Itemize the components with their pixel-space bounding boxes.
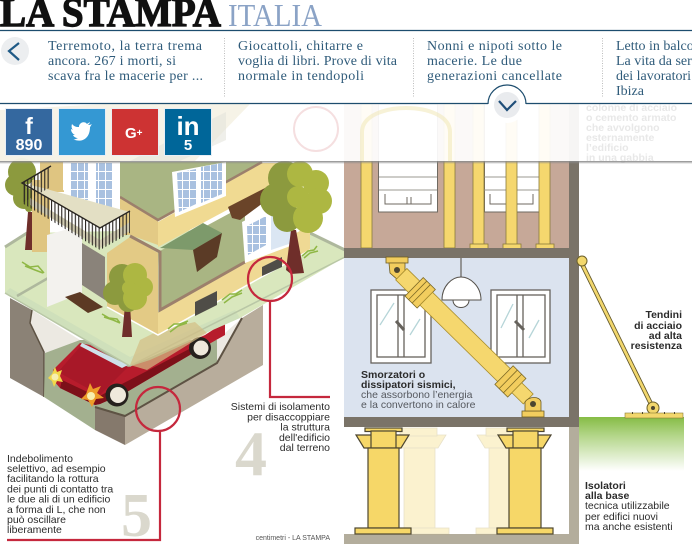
base pillars <box>355 428 553 534</box>
text: isolation systems <box>231 401 330 454</box>
text: tendons: resistenza <box>631 340 682 352</box>
text: isolation systems: per disaccoppiare <box>247 412 330 424</box>
lower right window <box>242 200 293 263</box>
shrubs <box>22 246 318 332</box>
left tree <box>5 158 36 250</box>
facebook: 890 <box>16 137 42 154</box>
news item 2 <box>238 39 398 84</box>
text: base isolators: Isolatori <box>585 480 626 492</box>
room windows <box>371 290 550 363</box>
faded text: steel columns: esternamente <box>586 132 654 144</box>
text: selective weakening: selettivo, ad esempio <box>7 463 106 475</box>
car <box>48 322 225 407</box>
headlights <box>48 367 104 407</box>
bench <box>160 223 222 272</box>
car roof seen through ground <box>130 322 207 370</box>
awning <box>228 187 267 220</box>
text: selective weakening: Indebolimento <box>7 453 73 465</box>
text: base isolators: alla base <box>585 490 630 502</box>
faded text: steel columns: colonne di acciaio <box>586 102 677 114</box>
text: selective weakening: facilitando la rottura <box>7 473 99 485</box>
facebook <box>6 108 52 156</box>
text: dampers: dissipatori sismici, <box>361 379 456 391</box>
sticky header <box>0 0 692 104</box>
faded text: steel columns: l’edificio <box>586 142 629 154</box>
large tree <box>260 161 332 274</box>
illustration: isometric house <box>5 158 345 445</box>
text: selective weakening: liberamente <box>7 524 62 536</box>
news item 1 <box>48 39 203 84</box>
balcony <box>22 166 130 250</box>
small tree <box>103 263 153 337</box>
google plus: G <box>125 125 137 142</box>
foundation and garage <box>10 298 263 445</box>
basement vents <box>195 257 282 316</box>
text: dampers <box>361 369 476 411</box>
text: selective weakening: dei punti di contatto tra <box>7 484 113 496</box>
text: base isolators <box>585 480 673 533</box>
news item 2: voglia di libri. Prove di vita <box>238 54 398 69</box>
news item 4 <box>616 39 692 99</box>
hanging lamp <box>442 258 481 308</box>
front door and entry <box>47 225 105 313</box>
upper yellow columns <box>361 104 554 248</box>
text: dampers: e la convertono in calore <box>361 399 476 411</box>
news item 3: macerie. Le due <box>427 54 522 69</box>
news item 3 <box>427 39 562 84</box>
twitter <box>58 108 106 156</box>
upper windows <box>378 104 540 212</box>
text: dampers: che assorbono l’energia <box>361 389 473 401</box>
share buttons <box>6 108 212 156</box>
steel tendon <box>577 256 684 471</box>
upper balcony window <box>63 162 120 217</box>
lower room <box>344 258 569 417</box>
news item 4: dei lavoratori <box>616 69 691 84</box>
news item 4: Ibiza <box>616 84 645 99</box>
text: dampers: Smorzatori o <box>361 369 425 381</box>
house walls <box>32 162 310 335</box>
header shadow <box>0 161 692 164</box>
news item 1: Terremoto, la terra trema <box>48 39 203 54</box>
faded text: steel columns: che avvolgono <box>586 122 660 134</box>
news item 3: Nonni e nipoti sotto le <box>427 39 562 54</box>
garden ground <box>5 230 345 366</box>
faded top layer under sticky header <box>0 104 692 161</box>
floor slabs and side wall <box>344 104 579 427</box>
news item 2: normale in tendopoli <box>238 69 364 84</box>
back arrow button <box>1 37 29 65</box>
text: tendons: ad alta <box>649 330 682 342</box>
text: isolation systems: dal terreno <box>280 442 330 454</box>
text: base isolators: ma anche esistenti <box>585 521 673 533</box>
upper floor wall <box>344 104 569 249</box>
expand arrow button <box>488 85 526 123</box>
pillar storey <box>344 427 569 534</box>
linkedin <box>164 108 212 156</box>
credit: centimetri - LA STAMPA <box>256 535 330 542</box>
text: tendons: di acciaio <box>634 320 682 332</box>
news item 1: scava fra le macerie per ... <box>48 69 203 84</box>
news item 3: generazioni cancellate <box>427 69 562 84</box>
news item 1: ancora. 267 i morti, si <box>48 54 176 69</box>
text: tendons <box>631 309 682 352</box>
google plus: + <box>137 128 143 139</box>
text: isolation systems: Sistemi di isolamento <box>231 401 330 413</box>
text: base isolators: per edifici nuovi <box>585 511 658 523</box>
google plus <box>112 108 158 156</box>
linkedin: 5 <box>184 137 192 154</box>
text: selective weakening: può oscillare <box>7 514 66 526</box>
text: isolation systems: la struttura <box>280 422 330 434</box>
faded text: steel columns: o cemento armato <box>586 112 676 124</box>
news item 2: Giocattoli, chitarre e <box>238 39 363 54</box>
callout 5: red circle and leader <box>7 387 180 540</box>
faded text: steel columns <box>586 102 677 164</box>
text: selective weakening <box>7 453 113 536</box>
text: base isolators: tecnica utilizzabile <box>585 500 670 512</box>
building cross-section <box>344 104 579 544</box>
text: selective weakening: le due ali di un edificio <box>7 494 110 506</box>
linkedin: in <box>176 111 200 141</box>
text: isolation systems: dell'edificio <box>279 432 330 444</box>
text: selective weakening: a forma di L, che non <box>7 504 106 516</box>
text: tendons: Tendini <box>645 309 682 321</box>
seismic damper <box>386 257 544 417</box>
facebook: f <box>25 113 33 139</box>
number 4: 4 <box>235 418 267 489</box>
upper right window <box>172 162 226 217</box>
callout 4: red circle and leader <box>248 257 330 397</box>
ghost pillars <box>393 428 530 534</box>
faded text: steel columns: in una gabbia <box>586 152 654 164</box>
